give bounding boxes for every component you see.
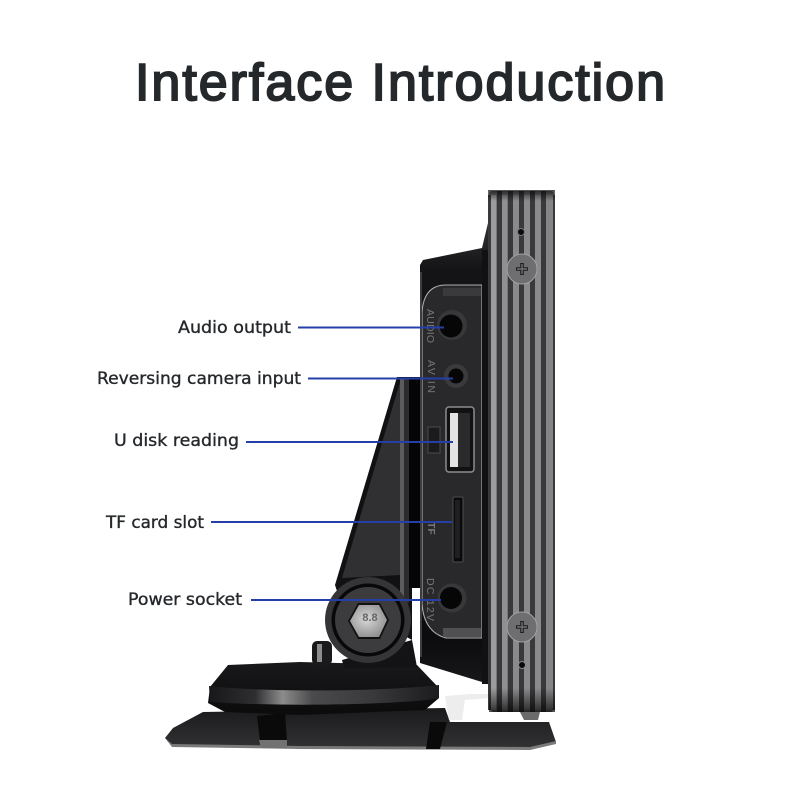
stand arm — [335, 377, 421, 668]
top hole — [518, 228, 524, 236]
base plate — [165, 694, 556, 750]
title: Interface Introduction — [135, 54, 665, 112]
screen panel with fins — [488, 190, 555, 720]
rear housing — [420, 223, 490, 685]
callout: audio output: Audio output — [178, 318, 292, 337]
callout: U disk reading: U disk reading — [114, 431, 239, 450]
bottom screw — [507, 612, 537, 642]
USB symbol — [428, 427, 440, 453]
device illustration — [165, 190, 556, 750]
round mount base — [208, 662, 439, 715]
callout: reversing camera input: Reversing camera input — [97, 369, 302, 388]
DC 12V print: DC 12V — [424, 578, 436, 621]
AV IN print: AV IN — [425, 360, 437, 393]
TF print: TF — [425, 522, 437, 535]
audio jack — [437, 310, 467, 340]
AV IN jack — [444, 364, 468, 388]
power jack — [438, 584, 466, 612]
top screw — [507, 254, 537, 284]
audio print: AUDIO — [424, 309, 436, 343]
callout: power socket: Power socket — [128, 590, 243, 609]
USB port — [446, 407, 474, 472]
pivot joint with bolt — [325, 577, 411, 663]
small post — [312, 641, 332, 665]
bottom hole — [518, 662, 526, 668]
TF card slot — [453, 497, 463, 562]
bolt marking: 8.8 — [362, 612, 378, 624]
callout: TF card slot: TF card slot — [105, 513, 205, 532]
